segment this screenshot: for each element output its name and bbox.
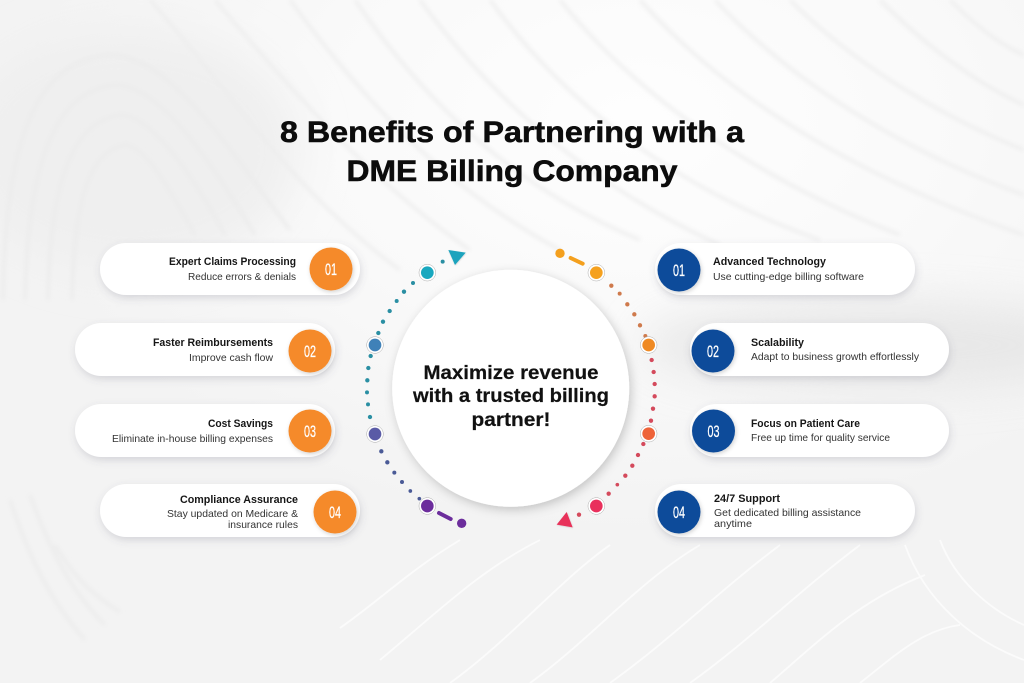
right item 1: advanced technology: Advanced Technology [713,256,827,268]
arc start: orange dot and dash [555,249,583,264]
number badge 01: 01 [325,261,337,279]
node: indigo [367,426,383,442]
left item 4: compliance assurance: Compliance Assurance [180,494,298,506]
left item 2: faster reimbursements [75,323,335,376]
right item 2: scalability: Adapt to business growth effortlessly [751,352,920,363]
right item 3: focus on patient care [690,404,949,457]
node: red-orange [640,425,657,442]
right item 3: focus on patient care: Focus on Patient Care [751,418,860,430]
arc tail: purple dash and dot [439,513,466,528]
node: orange [640,337,657,353]
left item 3: cost savings [75,404,335,457]
number badge 02 [288,330,332,372]
center circle: partner! [472,410,550,431]
title: 8 Benefits of Partnering with a [280,116,744,149]
right item 1: advanced technology: Use cutting-edge billing software [713,272,864,283]
arrowhead: red [557,512,573,527]
left item 1: expert claims processing: Expert Claims Processing [169,256,296,268]
right dotted arc with arrow [555,249,657,527]
number badge 01 [658,248,700,292]
right item 3: focus on patient care: Free up time for quality service [751,433,890,444]
right item 4: 24/7 support: 24/7 Support [714,493,780,505]
number badge 01 [310,248,352,290]
right item 4: 24/7 support [655,484,915,537]
right item 4: 24/7 support: Get dedicated billing assistance [714,508,861,519]
left item 4: compliance assurance: Stay updated on Medicare & [167,509,298,520]
right item 4: 24/7 support: anytime [714,519,752,530]
number badge 04 [314,490,356,534]
center circle: Maximize revenue [424,363,598,384]
right item 2: scalability [690,323,949,376]
title [280,116,744,188]
arrowhead: teal [448,250,466,265]
node: purple [419,498,436,514]
center circle: with a trusted billing [412,386,609,407]
node: amber [588,264,605,281]
number badge 02 [692,330,734,372]
left item 2: faster reimbursements: Faster Reimbursements [153,337,273,349]
left item 1: expert claims processing: Reduce errors & denials [188,272,296,283]
number badge 04: 04 [673,504,685,522]
right item 2: scalability: Scalability [751,337,805,349]
node: blue [367,337,383,353]
number badge 03 [288,410,332,452]
number badge 02: 02 [707,343,719,361]
node: crimson [588,498,605,514]
left item 2: faster reimbursements: Improve cash flow [189,353,274,364]
node: teal [419,264,436,281]
center circle [392,270,629,507]
number badge 03: 03 [708,423,720,441]
left item 4: compliance assurance: insurance rules [228,520,298,531]
right item 1: advanced technology [655,243,915,295]
number badge 04 [658,490,700,534]
left dotted arc with arrow [365,250,466,528]
number badge 03: 03 [304,423,316,441]
left item 3: cost savings: Cost Savings [208,418,273,430]
title: DME Billing Company [346,155,678,188]
number badge 02: 02 [304,343,316,361]
left item 1: expert claims processing [100,243,360,295]
left item 3: cost savings: Eliminate in-house billing expenses [112,434,273,445]
number badge 03 [692,410,735,452]
left item 4: compliance assurance [100,484,360,537]
number badge 04: 04 [329,504,341,522]
number badge 01: 01 [673,262,685,280]
